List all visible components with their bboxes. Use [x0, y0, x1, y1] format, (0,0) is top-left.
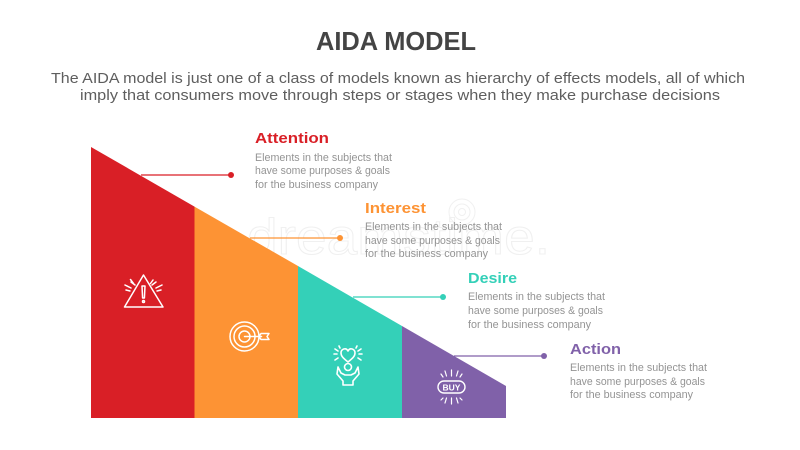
connector: desire	[353, 294, 446, 300]
segment: attention	[91, 147, 194, 418]
segment: action	[402, 326, 506, 418]
text block: interest: have some purposes & goals	[365, 235, 500, 247]
text block: action: Elements in the subjects that	[570, 362, 707, 374]
icon: heart in hands	[334, 346, 362, 385]
text block: interest: for the business company	[365, 248, 488, 260]
text block: attention: Elements in the subjects that	[255, 152, 392, 164]
icon: warning triangle	[124, 275, 163, 307]
text block: desire: Desire	[468, 270, 517, 287]
subtitle	[51, 70, 745, 104]
text block: desire: have some purposes & goals	[468, 305, 603, 317]
title: AIDA MODEL	[316, 26, 476, 56]
icon: buy badge: BUY	[443, 382, 461, 392]
text block: interest: Interest	[365, 200, 426, 217]
text block: action: Action	[570, 341, 621, 358]
text block: action: have some purposes & goals	[570, 376, 705, 388]
text block: attention	[255, 130, 392, 191]
text block: desire: Elements in the subjects that	[468, 291, 605, 303]
connector: attention	[141, 172, 234, 178]
text block: attention: for the business company	[255, 179, 378, 191]
connector: action	[454, 353, 547, 359]
connector: interest	[250, 235, 343, 241]
subtitle: The AIDA model is just one of a class of models known as hierarchy of effects models, all of which	[51, 70, 745, 87]
text block: interest	[365, 200, 502, 260]
text block: desire: for the business company	[468, 319, 591, 331]
text block: attention: Attention	[255, 130, 329, 147]
segment: desire	[298, 266, 402, 418]
text block: interest: Elements in the subjects that	[365, 221, 502, 233]
segment: interest	[194, 207, 298, 418]
stepped triangle chart	[91, 147, 506, 418]
icon: target with arrow	[230, 322, 269, 351]
text block: action: for the business company	[570, 389, 693, 401]
text block: desire	[468, 270, 605, 331]
text block: action	[570, 341, 707, 401]
text block: attention: have some purposes & goals	[255, 165, 390, 177]
icon: buy badge	[438, 370, 465, 404]
subtitle: imply that consumers move through steps or stages when they make purchase decisions	[80, 87, 720, 104]
watermark: dreamstime.	[247, 209, 550, 265]
